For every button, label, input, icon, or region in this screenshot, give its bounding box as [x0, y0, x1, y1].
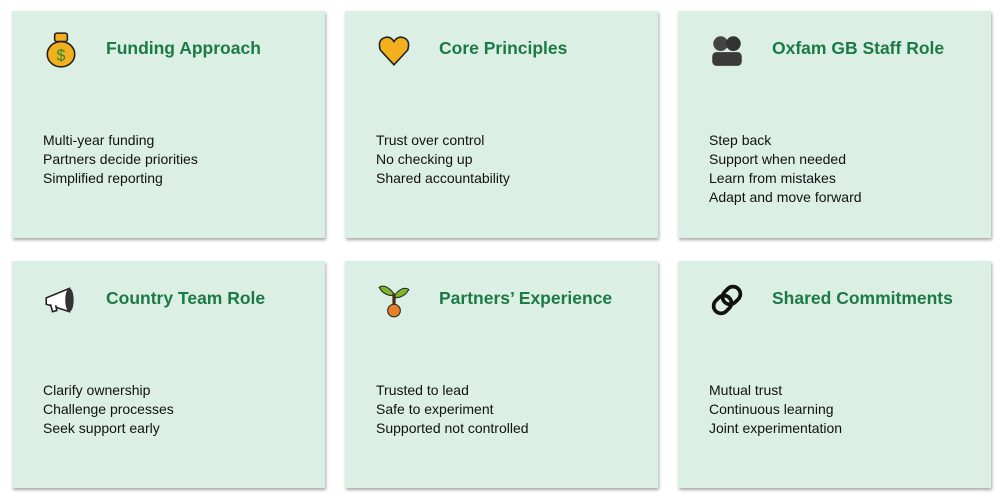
heading: Partners’ Experience: [439, 288, 612, 308]
text block: [709, 382, 842, 436]
text block: Step back: [709, 132, 771, 148]
text block: Simplified reporting: [43, 170, 163, 186]
text block: [709, 132, 862, 205]
text block: [376, 132, 510, 186]
heading: Oxfam GB Staff Role: [772, 38, 944, 58]
text block: Shared accountability: [376, 170, 510, 186]
text block: No checking up: [376, 151, 473, 167]
text block: Multi-year funding: [43, 132, 154, 148]
icon: people: [712, 36, 742, 66]
panel: oxfam gb staff role: [678, 11, 991, 238]
panel: funding approach: [12, 11, 325, 238]
icon: money bag: [46, 32, 76, 68]
text block: Joint experimentation: [709, 420, 842, 436]
icon: megaphone: [45, 287, 74, 313]
icon: link: [712, 284, 742, 316]
text block: Mutual trust: [709, 382, 782, 398]
text block: Support when needed: [709, 151, 846, 167]
panel: core principles: [345, 11, 658, 238]
panel: partners experience: [345, 261, 658, 488]
text block: Clarify ownership: [43, 382, 150, 398]
icon: money bag: $: [57, 48, 66, 65]
text block: Partners decide priorities: [43, 151, 198, 167]
text block: [376, 382, 529, 436]
text block: Adapt and move forward: [709, 189, 862, 205]
text block: Continuous learning: [709, 401, 834, 417]
text block: Seek support early: [43, 420, 160, 436]
heading: Funding Approach: [106, 38, 261, 58]
text block: Challenge processes: [43, 401, 174, 417]
text block: [43, 382, 174, 436]
text block: Supported not controlled: [376, 420, 529, 436]
icon: heart: [378, 36, 410, 66]
heading: Shared Commitments: [772, 288, 953, 308]
panel: shared commitments: [678, 261, 991, 488]
panel: country team role: [12, 261, 325, 488]
text block: Learn from mistakes: [709, 170, 836, 186]
heading: Country Team Role: [106, 288, 265, 308]
text block: Trust over control: [376, 132, 484, 148]
text block: Safe to experiment: [376, 401, 494, 417]
heading: Core Principles: [439, 38, 567, 58]
text block: Trusted to lead: [376, 382, 469, 398]
text block: [43, 132, 198, 186]
icon: sprout: [378, 286, 410, 318]
